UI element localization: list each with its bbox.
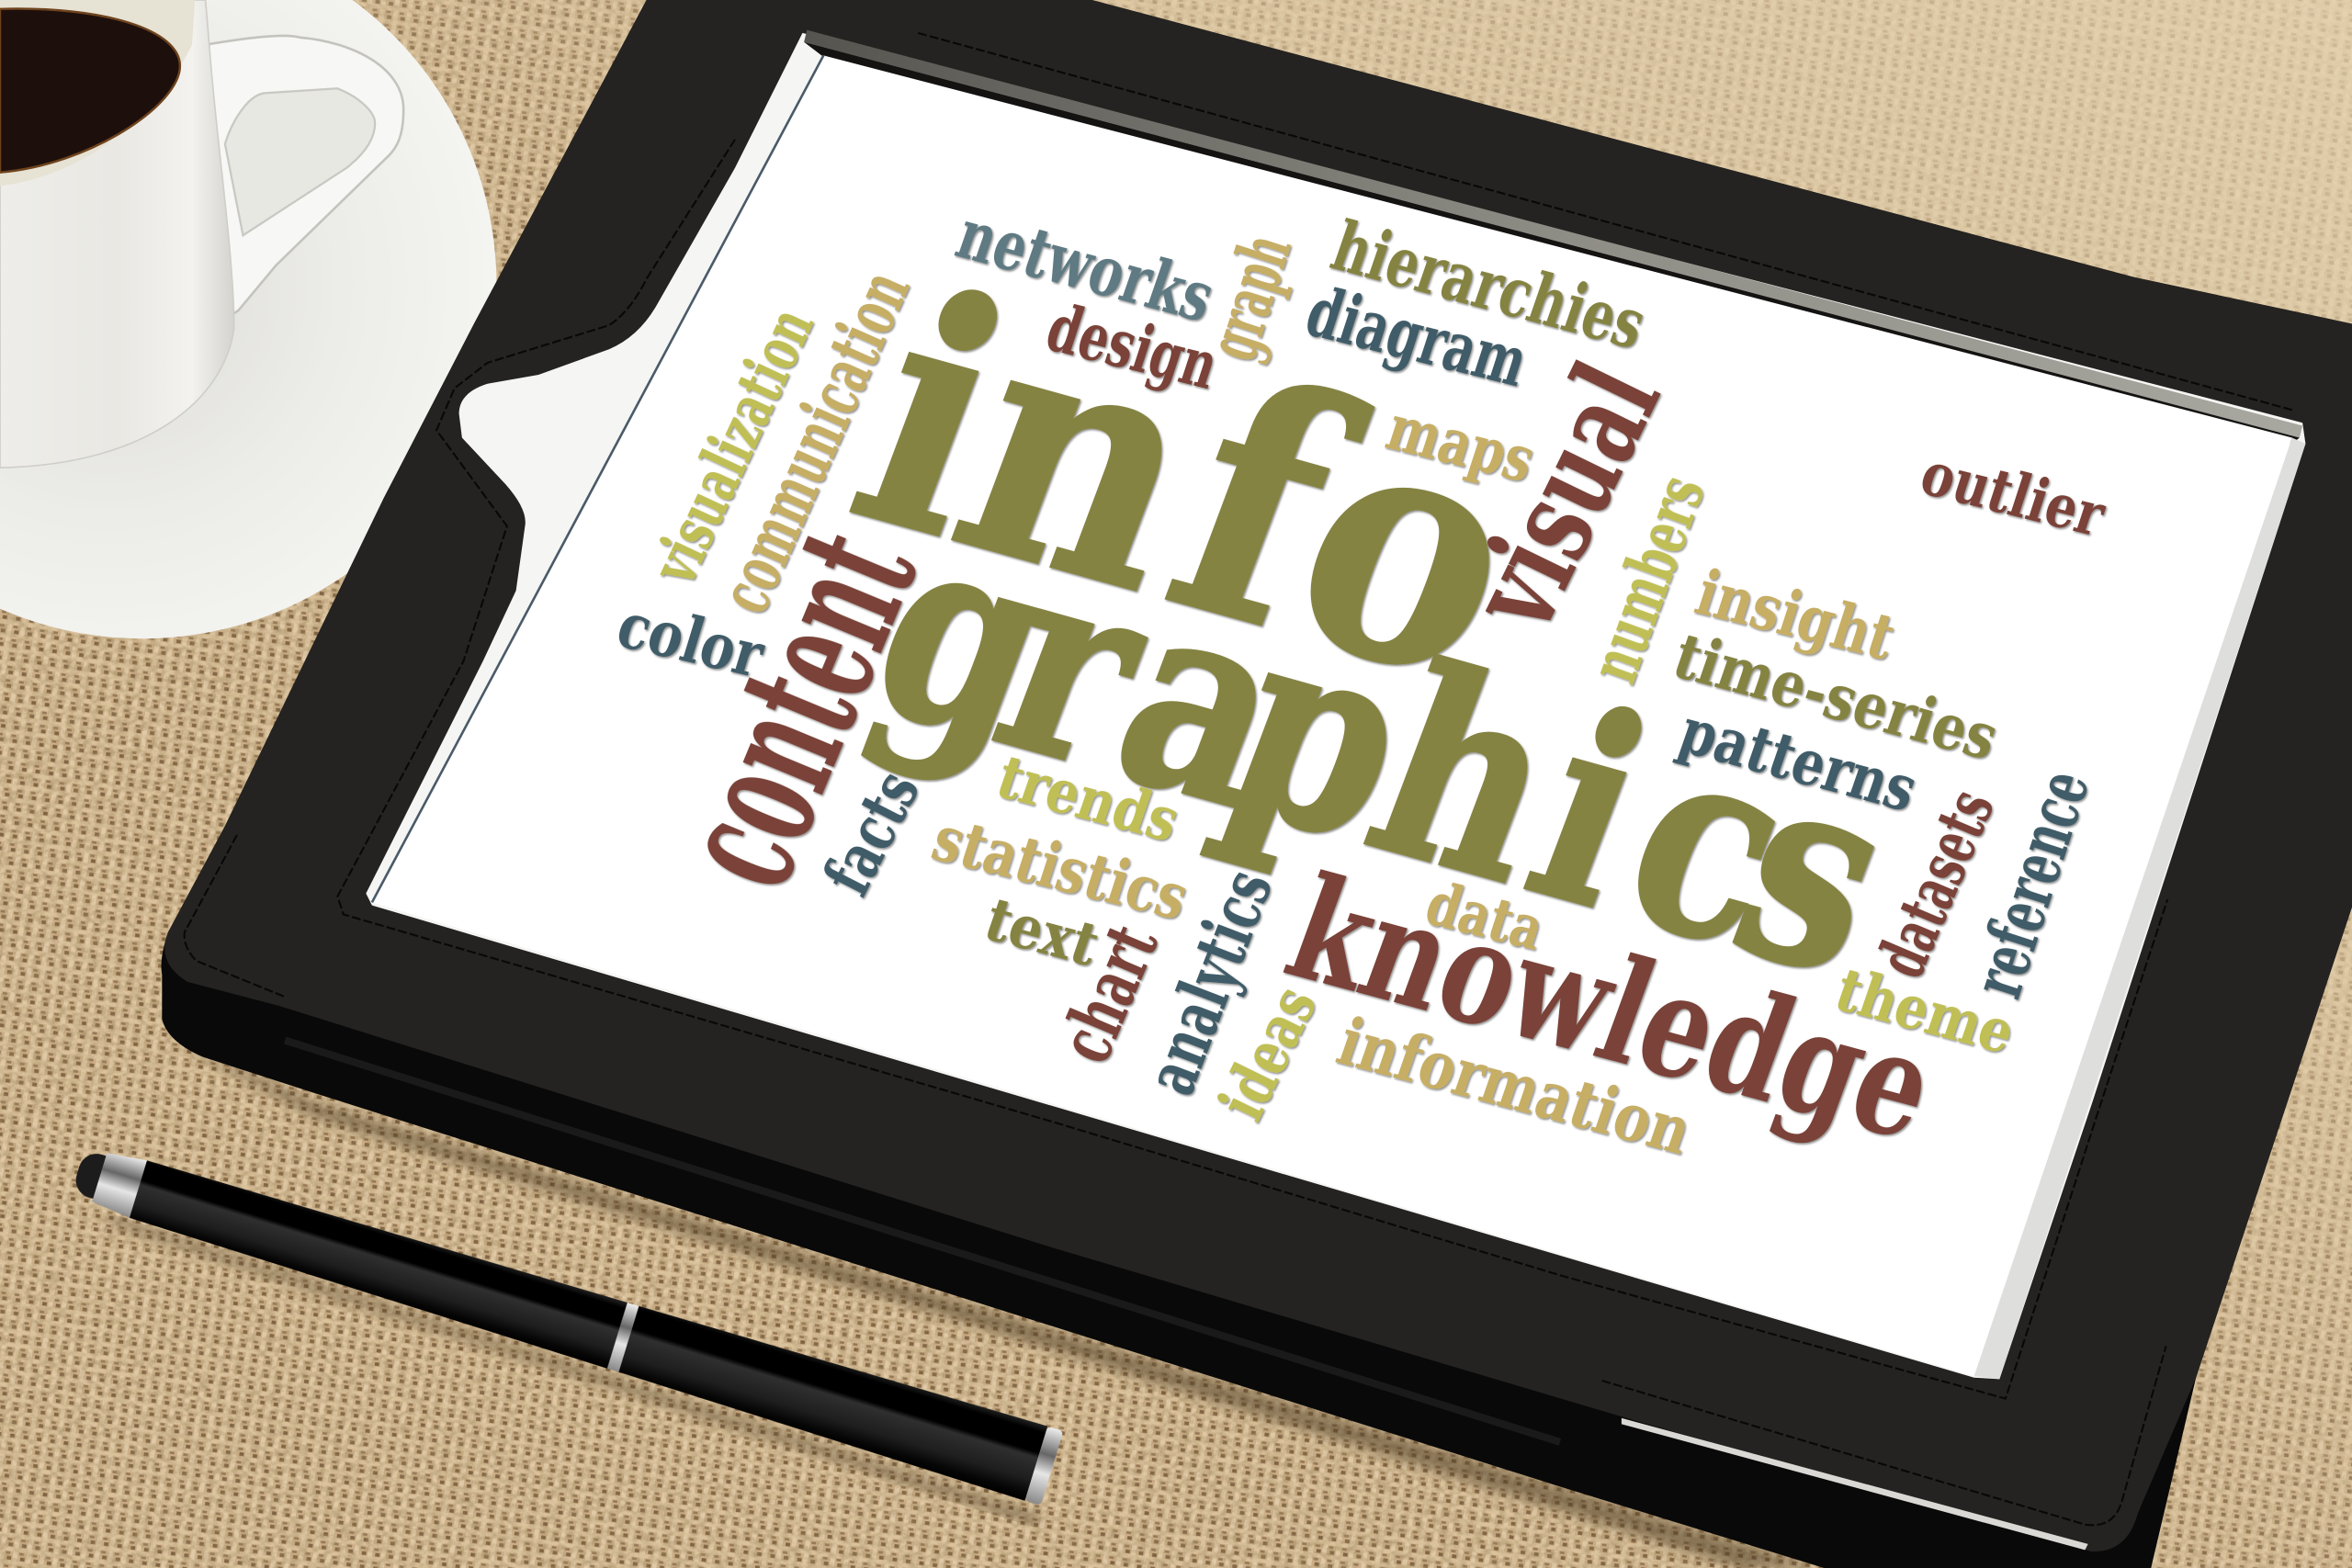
saucer bbox=[0, 0, 496, 638]
word: data: data bbox=[1418, 870, 1553, 964]
cup interior bbox=[0, 0, 195, 186]
screen left edge line bbox=[372, 55, 823, 902]
word: reference: reference bbox=[1956, 761, 2105, 1007]
screen bbox=[372, 55, 2292, 1376]
tablet shadow bbox=[162, 1034, 1824, 1568]
word: information: information bbox=[1329, 1002, 1702, 1169]
word: content: content bbox=[638, 505, 955, 911]
word: maps: maps bbox=[1378, 391, 1544, 497]
word: trends: trends bbox=[989, 742, 1188, 856]
word: text: text bbox=[977, 885, 1108, 980]
word: theme: theme bbox=[1826, 955, 2023, 1067]
word: chart: chart bbox=[1042, 913, 1174, 1074]
chrome collar bbox=[91, 1148, 147, 1218]
word: color: color bbox=[609, 589, 773, 693]
word: visualization: visualization bbox=[637, 297, 829, 595]
word: knowledge: knowledge bbox=[1268, 845, 1956, 1173]
word: visual: visual bbox=[1440, 343, 1687, 651]
coffee cup bbox=[0, 0, 403, 468]
glass bezel and home button notch bbox=[366, 33, 2305, 1379]
word: patterns: patterns bbox=[1670, 694, 1927, 827]
top glossy edge bbox=[804, 30, 2302, 438]
rubber tip bbox=[72, 1149, 122, 1203]
word: diagram: diagram bbox=[1297, 271, 1538, 402]
pen shadow bbox=[104, 1215, 1044, 1526]
word: numbers: numbers bbox=[1574, 466, 1720, 692]
pen body bbox=[128, 1156, 628, 1369]
pen cap bbox=[617, 1302, 1047, 1501]
right bezel edge bbox=[1974, 438, 2305, 1379]
word: time-series: time-series bbox=[1665, 620, 2007, 774]
spine rib bbox=[285, 1041, 1560, 1442]
chrome end bbox=[1024, 1427, 1063, 1506]
word: insight: insight bbox=[1687, 557, 1904, 675]
chrome edge strip bbox=[1622, 1418, 2088, 1550]
top dark edge bbox=[804, 42, 2300, 444]
word cloud bbox=[609, 193, 2114, 1173]
word: graph: graph bbox=[1192, 225, 1307, 369]
word: analytics: analytics bbox=[1129, 859, 1288, 1105]
handle opening bbox=[225, 88, 375, 235]
word: networks: networks bbox=[947, 193, 1225, 338]
word: outlier: outlier bbox=[1913, 439, 2114, 550]
stylus pen bbox=[61, 1134, 1065, 1526]
word: communication: communication bbox=[703, 259, 925, 625]
word: ideas: ideas bbox=[1205, 975, 1331, 1131]
cup body bbox=[0, 0, 234, 468]
word: graphics: graphics bbox=[840, 470, 1927, 1033]
word: design: design bbox=[1037, 288, 1227, 404]
coffee bbox=[0, 9, 180, 173]
word: statistics: statistics bbox=[923, 802, 1197, 935]
word: datasets: datasets bbox=[1861, 778, 2009, 988]
word: hierarchies: hierarchies bbox=[1322, 205, 1656, 365]
cup handle bbox=[195, 36, 403, 330]
word: facts: facts bbox=[808, 759, 934, 907]
word: info: info bbox=[814, 225, 1567, 752]
chrome band bbox=[607, 1303, 639, 1372]
